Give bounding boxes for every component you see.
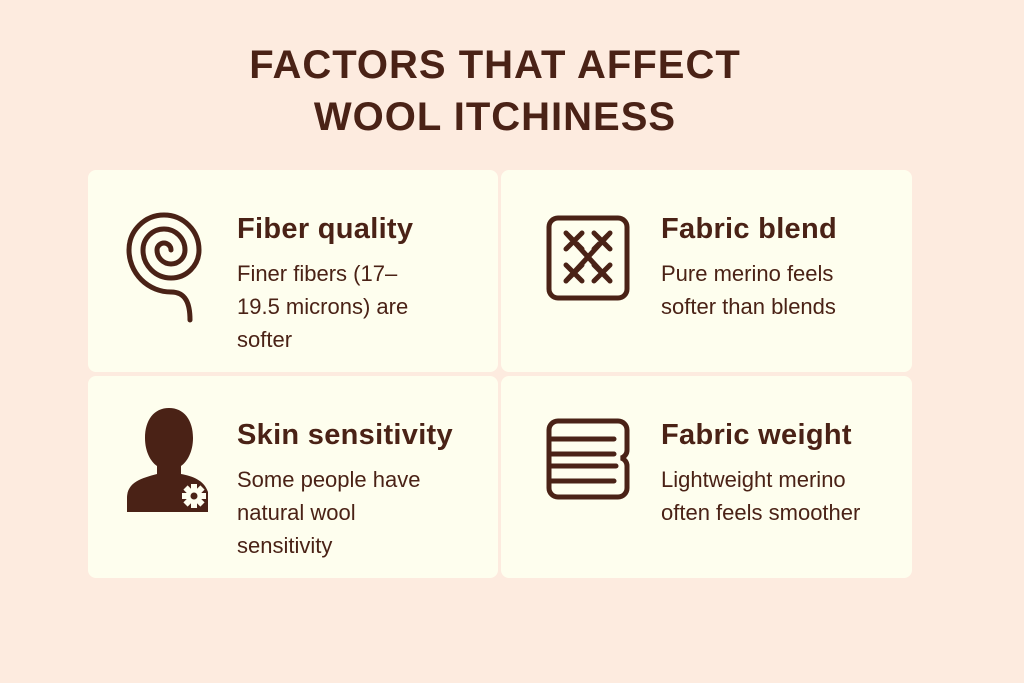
icon: cross stitch — [546, 216, 630, 300]
panel: fabric blend — [501, 170, 912, 372]
text — [661, 467, 860, 525]
icon: person with gear — [127, 408, 208, 512]
title — [249, 43, 741, 139]
title: FACTORS THAT AFFECT — [249, 43, 741, 87]
heading: Fiber quality — [237, 213, 413, 245]
text: Some people have — [237, 467, 420, 492]
text — [661, 261, 836, 319]
text: softer — [237, 327, 292, 352]
text: sensitivity — [237, 533, 332, 558]
icon: spiral — [126, 212, 202, 322]
panel: fiber quality — [88, 170, 498, 372]
heading: Fabric weight — [661, 419, 852, 451]
text: Finer fibers (17– — [237, 261, 397, 286]
text: Pure merino feels — [661, 261, 833, 286]
text — [237, 261, 408, 352]
text: often feels smoother — [661, 500, 860, 525]
title: WOOL ITCHINESS — [314, 95, 676, 139]
panel: skin sensitivity — [88, 376, 498, 578]
panel: fabric weight — [501, 376, 912, 578]
text — [237, 467, 420, 558]
icon: stacked layers — [546, 418, 630, 500]
text: natural wool — [237, 500, 356, 525]
text: 19.5 microns) are — [237, 294, 408, 319]
heading: Skin sensitivity — [237, 419, 453, 451]
heading: Fabric blend — [661, 213, 837, 245]
text: softer than blends — [661, 294, 836, 319]
text: Lightweight merino — [661, 467, 846, 492]
